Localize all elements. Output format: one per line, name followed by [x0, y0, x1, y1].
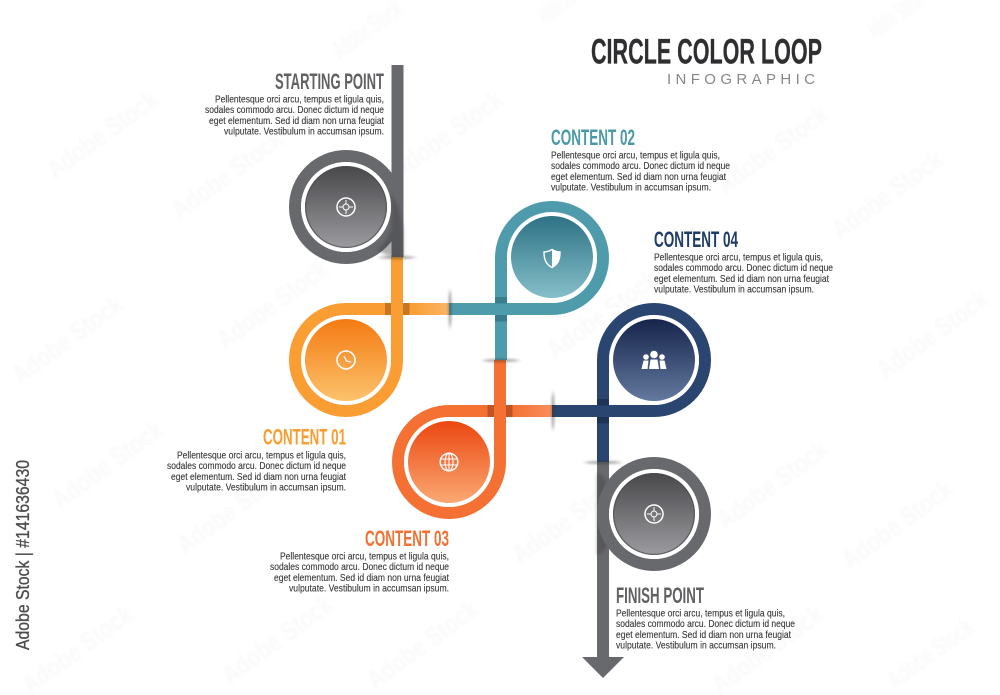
- text block: content 01: Pellentesque orci arcu, tempus et ligula quis,: [177, 450, 346, 462]
- disc: finish point: [609, 469, 699, 559]
- text block: content 02: sodales commodo arcu. Donec dictum id neque: [551, 161, 730, 172]
- watermark pattern: Adobe Stock: [171, 459, 294, 560]
- text block: content 03: CONTENT 03: [365, 526, 449, 551]
- disc: content 02: [507, 212, 597, 302]
- text block: finish point: [616, 583, 795, 652]
- watermark pattern: Adobe Stock: [6, 289, 129, 390]
- watermark pattern: Adobe Stock: [711, 434, 834, 535]
- text block: content 02: [551, 125, 730, 194]
- text block: content 03: eget elementum. Sed id diam non urna feugiat: [274, 573, 449, 584]
- text block: content 04: eget elementum. Sed id diam non urna feugiat: [654, 274, 829, 285]
- text block: content 01: eget elementum. Sed id diam non urna feugiat: [171, 472, 346, 483]
- watermark pattern: Adobe Stock: [166, 124, 289, 225]
- text block: content 04: sodales commodo arcu. Donec dictum id neque: [654, 263, 833, 274]
- watermark pattern: Adobe Stock: [826, 144, 949, 245]
- icon: compass: [337, 198, 355, 216]
- watermark pattern: Adobe Stock: [361, 594, 484, 695]
- text block: content 01: vulputate. Vestibulum in accumsan ipsum.: [186, 482, 346, 494]
- watermark pattern: Adobe Stock: [216, 589, 339, 690]
- disc: content 01: [301, 315, 391, 405]
- watermark pattern: Adobe Stock: [41, 84, 164, 185]
- icon: people: [642, 351, 666, 369]
- watermark pattern: Adobe Stock: [836, 474, 959, 575]
- text block: starting point: sodales commodo arcu. Donec dictum id neque: [205, 105, 384, 116]
- text block: content 02: eget elementum. Sed id diam non urna feugiat: [551, 172, 726, 183]
- text block: starting point: [205, 69, 384, 138]
- disc: starting point: [301, 162, 391, 252]
- text block: starting point: eget elementum. Sed id diam non urna feugiat: [209, 116, 384, 127]
- text block: content 04: vulputate. Vestibulum in accumsan ipsum.: [654, 284, 814, 296]
- text block: finish point: eget elementum. Sed id diam non urna feugiat: [616, 630, 791, 641]
- text block: content 02: vulputate. Vestibulum in accumsan ipsum.: [551, 182, 711, 194]
- watermark pattern: Adobe Stock: [541, 264, 664, 365]
- text block: finish point: sodales commodo arcu. Donec dictum id neque: [616, 619, 795, 630]
- text block: content 01: sodales commodo arcu. Donec dictum id neque: [167, 461, 346, 472]
- watermark pattern: Adobe Stock: [211, 254, 334, 355]
- text block: content 04: Pellentesque orci arcu, tempus et ligula quis,: [654, 252, 823, 264]
- text block: content 04: [654, 227, 833, 296]
- text block: starting point: vulputate. Vestibulum in accumsan ipsum.: [224, 126, 384, 138]
- loop: content 03 red-orange: [398, 360, 552, 513]
- text block: content 02: Pellentesque orci arcu, tempus et ligula quis,: [551, 150, 720, 162]
- subtitle: INFOGRAPHIC: [667, 71, 815, 88]
- disc: content 03: [404, 417, 494, 507]
- text block: starting point: STARTING POINT: [275, 69, 384, 94]
- text block: content 03: vulputate. Vestibulum in accumsan ipsum.: [289, 584, 449, 594]
- loop: finish point gray with arrow: [582, 462, 705, 678]
- text block: content 03: sodales commodo arcu. Donec dictum id neque: [270, 562, 449, 573]
- text block: content 03: [270, 526, 449, 594]
- watermark pattern: Adobe Stock: [46, 414, 169, 515]
- text block: content 02: CONTENT 02: [551, 125, 635, 150]
- text block: finish point: FINISH POINT: [616, 583, 704, 608]
- text block: content 03: Pellentesque orci arcu, tempus et ligula quis,: [280, 552, 449, 562]
- vertical stock credit: Adobe Stock | #141636430: [13, 460, 33, 650]
- title: CIRCLE COLOR LOOP: [591, 32, 822, 72]
- text block: finish point: vulputate. Vestibulum in accumsan ipsum.: [616, 640, 776, 652]
- loop: content 04 navy: [552, 309, 705, 462]
- text block: content 01: CONTENT 01: [263, 424, 346, 450]
- loop: content 01 orange: [295, 257, 449, 411]
- loop: starting point gray: [295, 65, 404, 258]
- icon: globe: [440, 453, 458, 471]
- watermark pattern: Adobe Stock: [506, 469, 629, 570]
- arrow head: [582, 657, 624, 678]
- watermark pattern: Adobe Stock: [711, 99, 834, 200]
- icon: clock: [337, 351, 355, 369]
- text block: starting point: Pellentesque orci arcu, tempus et ligula quis,: [215, 94, 384, 106]
- joint shadows between colored segments: [379, 256, 621, 464]
- icon: shield: [544, 250, 560, 268]
- text block: finish point: Pellentesque orci arcu, tempus et ligula quis,: [616, 608, 785, 620]
- watermark pattern: Adobe Stock: [386, 84, 509, 185]
- disc: content 04: [609, 315, 699, 405]
- text block: content 01: [167, 424, 346, 494]
- icon: compass: [645, 505, 663, 523]
- loop: content 02 teal: [449, 207, 603, 360]
- text block: content 04: CONTENT 04: [654, 227, 738, 252]
